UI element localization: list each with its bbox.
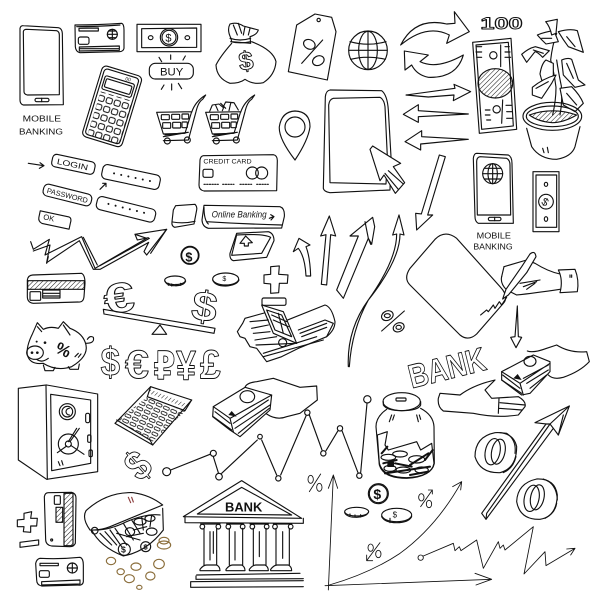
icon: open purse with coins: [85, 493, 163, 556]
icon: tablet with cursor: [323, 90, 405, 193]
arrow: straight up: [321, 216, 336, 285]
label: mobile banking right: [473, 231, 513, 252]
icon: globe: [349, 31, 387, 70]
icon: open purse with coins: $: [121, 544, 126, 554]
icon: tilted dollar sign: $: [115, 441, 161, 489]
icon: flat coin: [345, 507, 369, 517]
chart: line chart: [163, 396, 371, 481]
currency symbols: [101, 341, 221, 389]
icon: bank card bottom: [36, 557, 83, 586]
icon: dollar bill: [137, 24, 201, 52]
icon: flat coin: [165, 276, 186, 286]
icon: writing hand: [501, 252, 578, 299]
icon: minus small: [20, 540, 39, 547]
quadrant: bottom right doodles: [308, 306, 589, 590]
icon: money bag: [216, 23, 276, 83]
icon: smartphone: [20, 26, 63, 105]
icon: desk calculator: [115, 387, 192, 445]
chart: zigzag trend arrow: [418, 527, 575, 574]
arrow: small curved up: [293, 238, 311, 276]
icon: big percent with arrow: [475, 406, 569, 519]
icon: percent tag: [288, 14, 336, 80]
icon: open purse with coins: $: [143, 543, 148, 552]
icon: dollar coin: $: [185, 251, 192, 265]
arrow: long down: [416, 155, 445, 230]
login form: LOGIN: [56, 157, 89, 172]
icon: plus small: [17, 512, 37, 532]
label: mobile banking right: MOBILE: [477, 231, 511, 241]
currency symbols: $: [101, 341, 120, 385]
credit card: [199, 155, 277, 191]
currency symbols: ₽: [153, 344, 175, 388]
icon: dollar flat coin: [213, 273, 239, 286]
arrow: left top: [403, 105, 468, 122]
icon: location pin: [279, 111, 310, 160]
icon: wallet: [237, 305, 335, 362]
icon: keyboard key with arrow: [230, 232, 274, 261]
label: mobile banking right: BANKING: [473, 242, 513, 252]
icon: paper with signature: [407, 234, 507, 338]
icon: vertical dollar bill: $: [539, 196, 550, 209]
icon: dollar flat coin: [382, 508, 412, 523]
icon: money bag: $: [237, 45, 256, 77]
icon: shopping cart empty: [157, 95, 206, 144]
icon: buy button: BUY: [160, 66, 184, 78]
percent labels: [308, 474, 432, 561]
icon: cycle arrows: [401, 12, 469, 77]
label: mobile banking: MOBILE: [23, 114, 62, 124]
currency symbols: ¥: [176, 342, 196, 389]
icon: safe: [18, 385, 98, 479]
online banking button: [202, 205, 284, 228]
label: mobile banking: [19, 114, 63, 136]
icon: vertical card: [44, 492, 76, 547]
icon: plus: [264, 266, 288, 293]
icon: calculator: [82, 65, 143, 148]
icon: smartphone with globe: [473, 153, 513, 223]
quadrant: top left doodles: [19, 23, 310, 305]
icon: seesaw: [103, 309, 215, 334]
icon: striped card: [27, 273, 85, 303]
icon: piggy bank: [27, 322, 94, 371]
icon: dollar coin: [181, 246, 199, 265]
icon: minus: [262, 298, 286, 305]
icon: money jar: [376, 393, 434, 478]
icon: vertical dollar bill: [533, 172, 559, 232]
icon: dollar coin: $: [373, 486, 381, 502]
arrow: right: [406, 84, 471, 101]
arrow: long curved up: [348, 215, 404, 367]
label: 100: 100: [480, 14, 523, 33]
icon: hand giving money: [502, 345, 589, 395]
icon: small percent: [380, 309, 406, 334]
icon: dollar coin: [368, 484, 388, 504]
icon: hand holding money: [213, 378, 317, 437]
arrow: thick up: [337, 217, 375, 298]
currency symbols: £: [200, 342, 221, 388]
icon: zigzag arrow: [31, 229, 167, 269]
icon: dollar flat coin: $: [222, 276, 226, 283]
icon: open hand: [438, 380, 525, 416]
arrow: short down: [511, 306, 522, 348]
icon: bank building: BANK: [225, 499, 263, 514]
label: mobile banking: BANKING: [19, 126, 63, 136]
chart: growth axes with curve: [325, 475, 492, 590]
icon: shopping cart full: [206, 95, 255, 144]
quadrant: top right doodles: [288, 12, 585, 367]
icon: key button blank: [172, 204, 197, 227]
icon: bank card: [75, 23, 124, 53]
icon: vertical 100 bill: [473, 38, 517, 133]
credit card: CREDIT CARD: [203, 158, 252, 165]
icon: euro sign: €: [101, 272, 137, 323]
icon: dollar flat coin: $: [393, 510, 398, 519]
icon: piggy bank: %: [53, 338, 74, 362]
word: BANK: BANK: [405, 341, 490, 396]
icon: bank building: [183, 481, 303, 587]
arrow: left bottom: [405, 131, 468, 150]
currency symbols: €: [125, 343, 149, 387]
icon: dollar bill: $: [165, 32, 171, 44]
icon: dollar on seesaw: $: [189, 281, 220, 331]
coins scattered: [106, 537, 171, 589]
icon: money plant: [522, 19, 585, 159]
login form: PASSWORD: [46, 186, 89, 205]
login form: [28, 154, 161, 229]
icon: calculator: 00: [124, 76, 132, 84]
quadrant: bottom left doodles: [17, 272, 371, 589]
login form: OK: [42, 212, 56, 224]
online banking button: Online Banking: [212, 210, 267, 220]
icon: buy button: [149, 55, 193, 90]
